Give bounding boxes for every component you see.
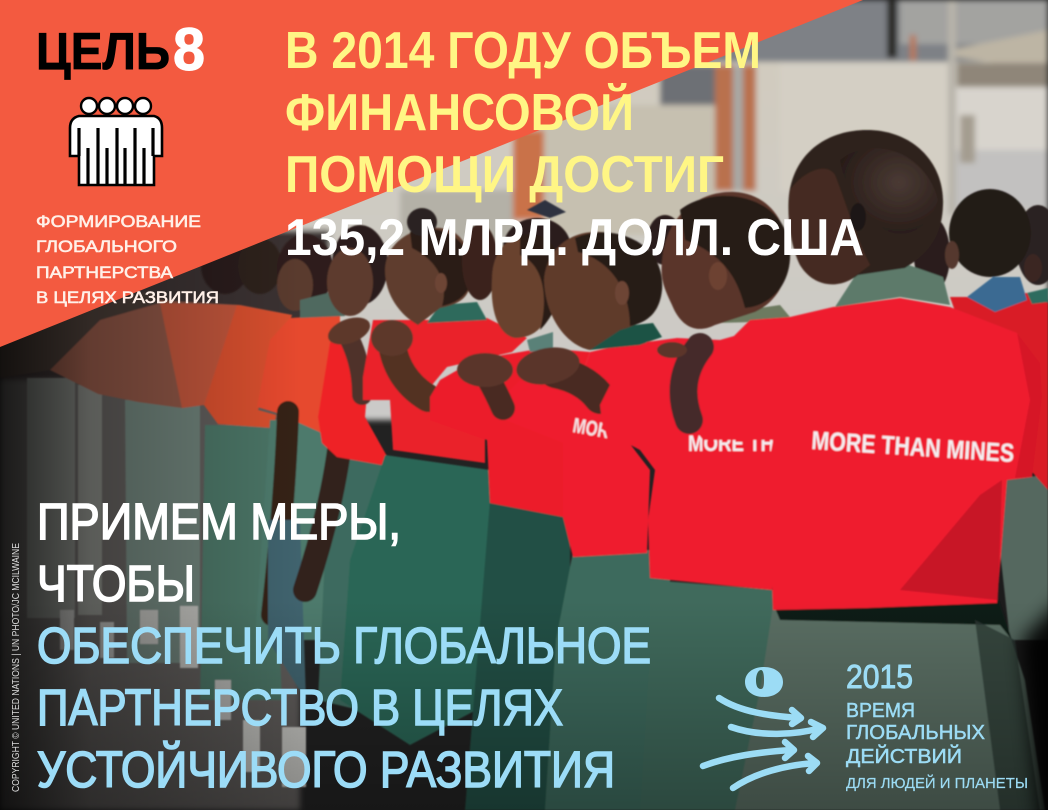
heading: goal 8: ЦЕЛЬ — [36, 23, 170, 81]
call to action text: ПРИМЕМ МЕРЫ, — [37, 493, 401, 550]
goal description — [36, 212, 219, 307]
goal description: ГЛОБАЛЬНОГО — [36, 237, 177, 256]
girl 3 — [457, 232, 672, 810]
girl 2 — [600, 192, 790, 810]
girl 5 — [340, 228, 527, 745]
logo text: time for global action: ДЛЯ ЛЮДЕЙ И ПЛАНЕТЫ — [846, 774, 1028, 792]
girl 7 — [255, 234, 345, 640]
girl 6 — [268, 225, 400, 720]
call to action text: ОБЕСПЕЧИТЬ ГЛОБАЛЬНОЕ — [37, 617, 651, 674]
logo text: time for global action: ВРЕМЯ — [846, 700, 915, 722]
girl 2: MORE TH — [688, 431, 774, 456]
call to action text: УСТОЙЧИВОГО РАЗВИТИЯ — [37, 740, 615, 798]
big girl in front — [657, 130, 1045, 810]
logo text: time for global action: ГЛОБАЛЬНЫХ — [846, 722, 985, 744]
copyright credit: COPYRIGHT © UNITED NATIONS | UN PHOTO/JC MCILWAINE — [10, 543, 22, 792]
call to action text — [37, 493, 651, 798]
logo text: time for global action: 2015 — [846, 658, 913, 695]
headline: financial aid: В 2014 ГОДУ ОБЪЕМ — [285, 22, 761, 80]
far left faded girls — [0, 238, 306, 787]
orange diagonal panel — [0, 0, 863, 347]
icon: four people joined — [70, 98, 162, 185]
call to action text: ЧТОБЫ — [37, 555, 195, 612]
headline: financial aid: ПОМОЩИ ДОСТИГ — [285, 146, 724, 204]
headline: financial aid — [285, 22, 864, 267]
girl 4 — [430, 234, 590, 810]
logo text: time for global action — [846, 658, 1028, 792]
far right girls — [914, 189, 1048, 640]
goal description: ПАРТНЕРСТВА — [36, 263, 174, 282]
small heads in the back row — [407, 200, 683, 300]
goal description: В ЦЕЛЯХ РАЗВИТИЯ — [36, 288, 219, 307]
call to action text: ПАРТНЕРСТВО В ЦЕЛЯХ — [37, 679, 563, 736]
headline: financial aid: 135,2 МЛРД. ДОЛЛ. США — [285, 209, 864, 267]
girl 3: MOR — [571, 414, 611, 443]
icon: 2015 logo O and arrows — [703, 667, 823, 788]
logo text: time for global action: ДЕЙСТВИЙ — [846, 744, 962, 768]
goal description: ФОРМИРОВАНИЕ — [36, 212, 201, 231]
heading: goal 8: 8 — [173, 16, 205, 83]
headline: financial aid: ФИНАНСОВОЙ — [285, 83, 634, 142]
